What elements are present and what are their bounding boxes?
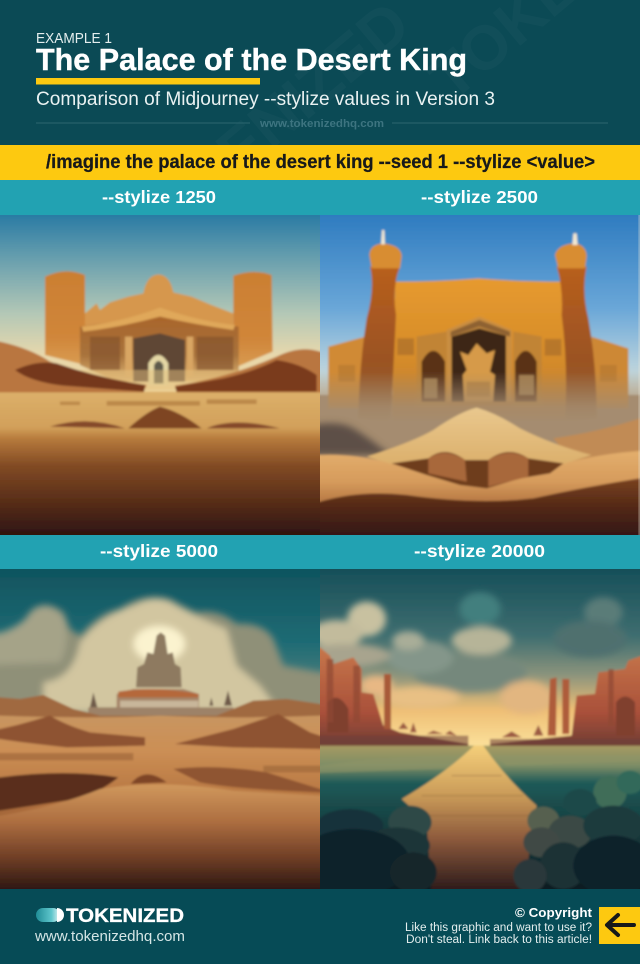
header background — [0, 0, 640, 145]
icon: yellow arrow box — [599, 907, 640, 944]
logo wordmark: TOKENIZED — [66, 906, 184, 927]
title underline — [36, 78, 260, 84]
right dunes — [175, 349, 353, 392]
foreground sand band — [287, 448, 640, 505]
label bar: lower row — [0, 535, 640, 569]
label bar: top row: --stylize 1250 — [102, 187, 216, 207]
right tower — [233, 272, 273, 368]
footer logo — [34, 906, 185, 945]
dust haze — [287, 372, 640, 472]
bushes — [297, 771, 640, 896]
ground — [0, 392, 353, 568]
left cliffs — [287, 647, 468, 749]
main wall — [392, 278, 568, 422]
right minaret — [557, 267, 597, 422]
sun glow — [133, 626, 185, 662]
header text block — [36, 31, 608, 130]
distant palace — [136, 632, 182, 687]
carved gate — [447, 317, 512, 402]
source url with rules: www.tokenizedhq.com — [259, 118, 384, 130]
image: stylize 5000 palace — [0, 569, 320, 889]
prompt banner — [0, 145, 640, 180]
foreground sand — [0, 784, 353, 922]
label bar: top row: --stylize 2500 — [421, 187, 538, 207]
right dune — [175, 714, 353, 749]
eyebrow: example number: EXAMPLE 1 — [36, 31, 112, 47]
label bar: top row — [0, 180, 640, 215]
clouds — [0, 597, 353, 716]
right cliffs — [490, 656, 640, 749]
title: The Palace of the Desert King — [36, 43, 467, 77]
fields — [287, 746, 640, 922]
side arches — [417, 332, 447, 408]
ground — [0, 716, 353, 922]
road — [402, 746, 537, 922]
copyright note: Like this graphic and want to use it? — [405, 922, 592, 934]
cave under the peak — [392, 452, 563, 488]
subtitle: Comparison of Midjourney --stylize values in Version 3 — [36, 89, 495, 110]
hall — [80, 315, 239, 382]
dark foreground — [287, 475, 640, 568]
central roofline and dome — [85, 274, 233, 332]
clouds — [303, 592, 627, 714]
copyright note — [405, 905, 593, 946]
watermark — [105, 0, 640, 332]
hollow left — [0, 773, 118, 811]
side wings — [328, 337, 365, 408]
left minaret — [358, 267, 400, 422]
left dunes — [0, 342, 147, 392]
footer url: www.tokenizedhq.com — [34, 928, 185, 945]
copyright note: © Copyright — [515, 905, 593, 920]
prompt banner: /imagine the palace of the desert king --seed 1 --stylize <value> — [46, 152, 595, 173]
panels — [397, 338, 561, 356]
mid dunes — [128, 407, 202, 428]
footer background — [0, 889, 640, 964]
image: stylize 20000 road — [320, 569, 640, 889]
copyright note: Don't steal. Link back to this article! — [406, 934, 592, 946]
image: stylize 2500 palace — [320, 215, 640, 535]
left tower — [45, 271, 85, 365]
left dune — [0, 716, 145, 747]
far hills — [0, 695, 353, 729]
sand peak — [367, 408, 592, 464]
label bar: lower row: --stylize 5000 — [100, 541, 218, 561]
gate — [148, 355, 168, 385]
throne — [460, 343, 495, 402]
haze — [80, 370, 240, 390]
logo mark — [36, 908, 64, 922]
image: stylize 1250 palace — [0, 215, 320, 535]
label bar: lower row: --stylize 20000 — [414, 541, 545, 561]
back dune right — [553, 415, 640, 462]
